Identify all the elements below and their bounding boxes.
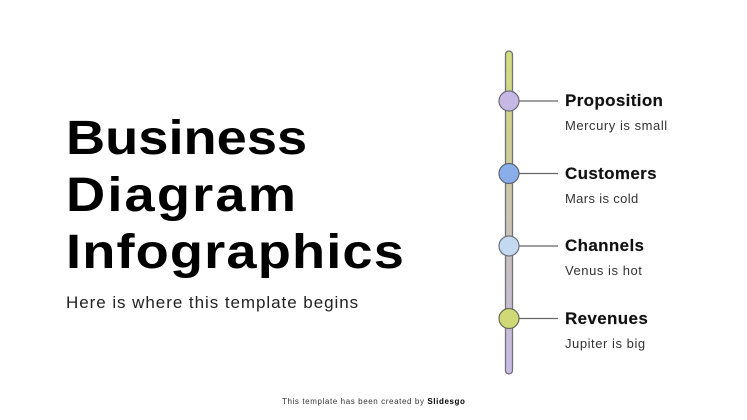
node: revenues [499, 308, 519, 328]
text: venus: Venus is hot [565, 263, 642, 278]
label: channels: Channels [565, 236, 644, 255]
vertical bar [506, 51, 512, 374]
text: mars: Mars is cold [565, 191, 639, 206]
label: revenues: Revenues [565, 309, 648, 328]
text: jupiter: Jupiter is big [565, 336, 646, 351]
node: channels [499, 236, 519, 256]
footer credit: This template has been created by Slidesgo [282, 397, 466, 406]
label: customers: Customers [565, 164, 657, 183]
connector: channels [519, 245, 558, 247]
node: customers [499, 164, 519, 184]
title [66, 112, 405, 279]
label: proposition: Proposition [565, 91, 663, 110]
title: Infographics [66, 226, 405, 279]
connector: proposition [519, 100, 558, 102]
subtitle: Here is where this template begins [66, 293, 359, 312]
title: Business [66, 112, 307, 165]
node: proposition [499, 91, 519, 111]
title: Diagram [66, 169, 298, 222]
text: mercury: Mercury is small [565, 118, 668, 133]
connector: revenues [519, 318, 558, 320]
connector: customers [519, 172, 558, 174]
